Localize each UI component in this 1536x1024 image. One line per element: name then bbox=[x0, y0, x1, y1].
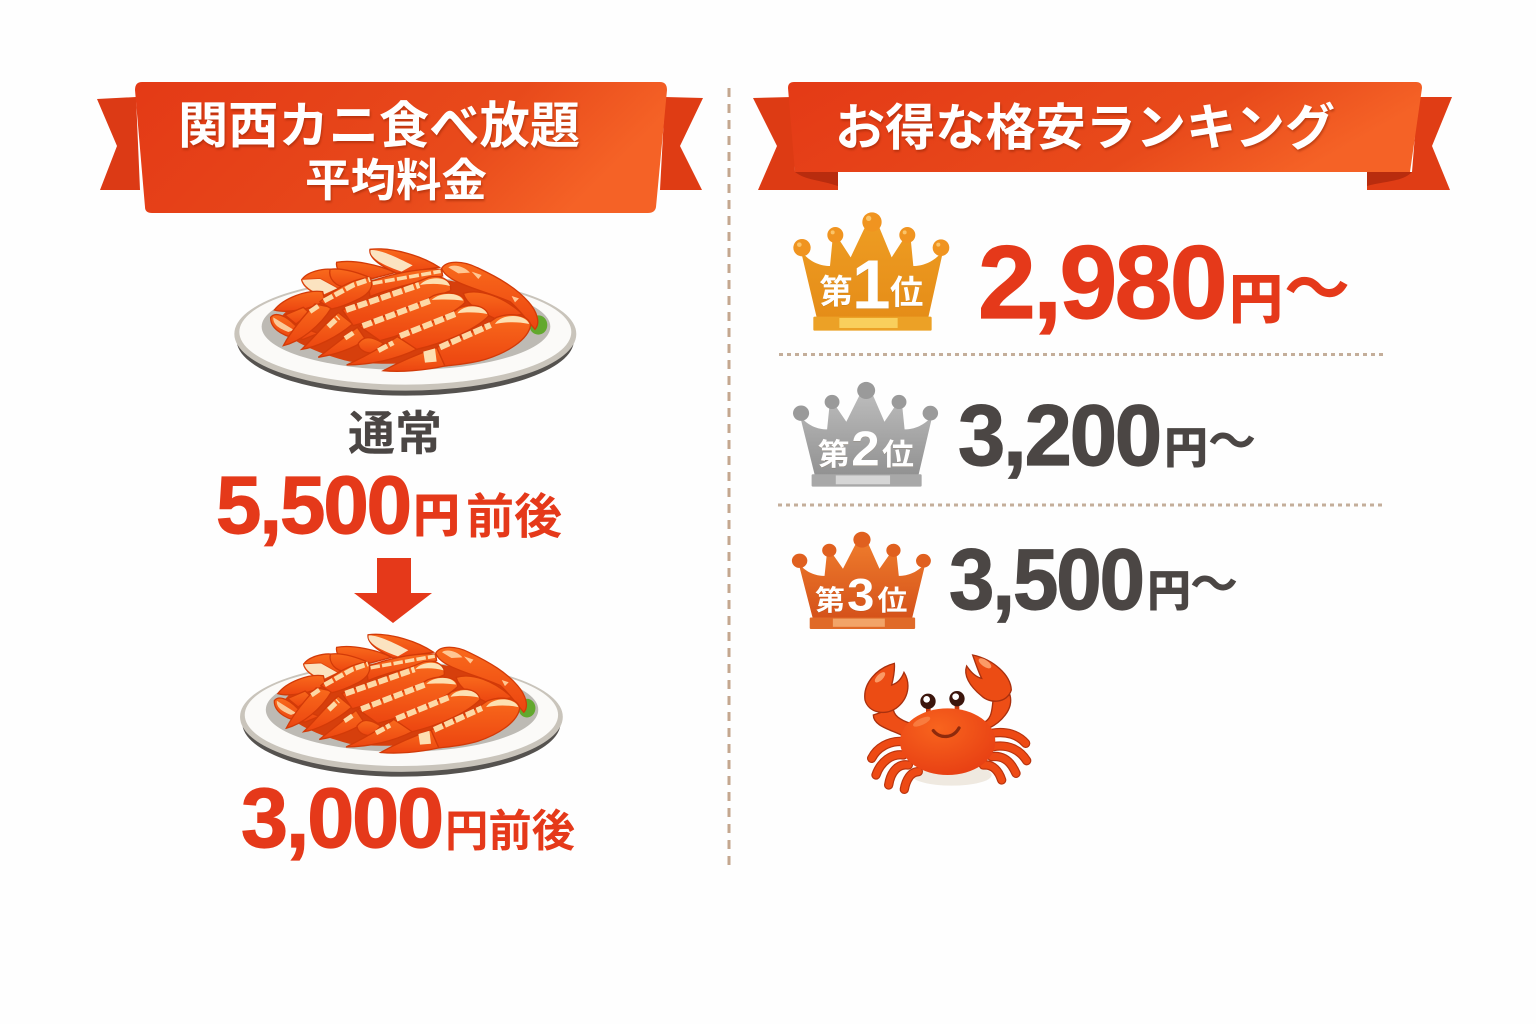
icon: gold crown: 第 bbox=[819, 264, 853, 313]
rank 2 row: 円 bbox=[1164, 412, 1208, 476]
buffet price bbox=[241, 771, 575, 865]
buffet price: 円前後 bbox=[445, 795, 575, 859]
rank 2 row bbox=[793, 382, 1256, 487]
icon: bronze crown: 位 bbox=[877, 579, 908, 618]
plate of crab legs: regular price bbox=[234, 249, 576, 396]
rank 3 row bbox=[792, 532, 1238, 629]
icon: bronze crown: 3 bbox=[847, 569, 874, 620]
icon: bronze crown bbox=[792, 532, 931, 629]
icon: silver crown bbox=[793, 382, 938, 487]
rank 3 row: ～ bbox=[1190, 545, 1238, 615]
rank 1 row: 円 bbox=[1229, 255, 1283, 334]
heading text: お得な格安ランキング bbox=[835, 88, 1335, 160]
heading subtitle: 平均料金 bbox=[305, 144, 487, 209]
arrow: down bbox=[354, 558, 432, 623]
icon: silver crown: 2 bbox=[851, 422, 880, 476]
buffet price: 3,000 bbox=[241, 771, 442, 865]
banner: right heading bbox=[753, 82, 1452, 190]
icon: gold crown bbox=[793, 212, 949, 331]
rank 1 row bbox=[793, 212, 1350, 341]
icon: silver crown: 第 bbox=[818, 430, 850, 474]
center dashed divider bbox=[728, 88, 730, 868]
regular price bbox=[216, 460, 562, 551]
dotted separator 2 bbox=[778, 504, 1385, 506]
plate of crab legs: buffet price bbox=[240, 634, 563, 777]
price: rank 2: 3,200 bbox=[958, 388, 1160, 484]
price: rank 1: 2,980 bbox=[978, 225, 1225, 341]
icon: silver crown: 位 bbox=[882, 430, 914, 474]
icon: crab mascot bbox=[865, 655, 1027, 789]
icon: gold crown: 1 bbox=[852, 245, 891, 323]
regular price: 5,500 bbox=[216, 460, 410, 551]
price: rank 3: 3,500 bbox=[949, 532, 1143, 628]
regular price: 円 bbox=[413, 477, 460, 546]
icon: bronze crown: 第 bbox=[815, 579, 845, 618]
dotted separator 1 bbox=[779, 353, 1385, 356]
icon: gold crown: 位 bbox=[890, 265, 923, 314]
regular price: 前後 bbox=[466, 477, 562, 547]
heading text: 関西カニ食べ放題 bbox=[178, 86, 580, 158]
banner: left heading bbox=[97, 82, 703, 213]
rank 2 row: ～ bbox=[1208, 402, 1256, 472]
rank 3 row: 円 bbox=[1147, 555, 1191, 619]
rank 1 row: ～ bbox=[1284, 236, 1350, 332]
label: regular: 通常 bbox=[348, 395, 442, 464]
